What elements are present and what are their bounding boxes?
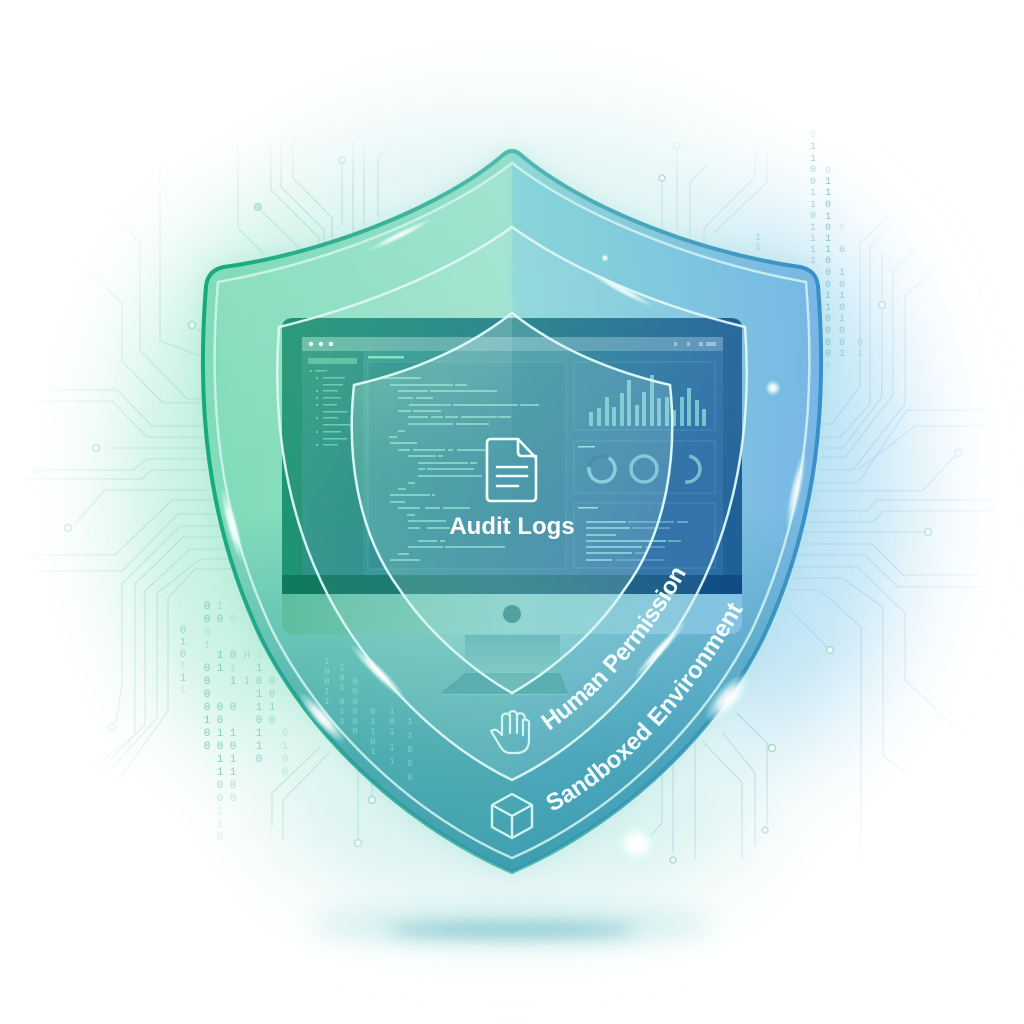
window dots [309, 342, 333, 346]
binary rain left: 0 [269, 715, 275, 727]
donut panel [574, 441, 715, 493]
monitor [282, 318, 742, 695]
binary rain right: 0 [825, 314, 831, 325]
binary rain left: 0 [217, 780, 223, 792]
light flares [216, 215, 811, 866]
binary rain right: 1 [755, 303, 761, 314]
binary rain left: 1 [282, 741, 289, 753]
binary rain right: 0 [825, 280, 831, 291]
binary rain left: 0 [204, 663, 210, 675]
top right traces [662, 149, 768, 244]
table panel [574, 503, 715, 568]
binary seen through the glass: 1 [389, 757, 395, 767]
binary seen through the glass: 1 [389, 727, 395, 737]
binary rain right: 1 [825, 245, 831, 256]
binary seen through the glass: 0 [370, 737, 376, 747]
binary rain right: 0 [839, 303, 845, 314]
monitor power button [503, 605, 521, 623]
outer shield body [203, 151, 821, 872]
binary seen through the glass: 1 [324, 657, 330, 667]
middle shield: Human Permission layer [277, 227, 747, 780]
inner shield left facet [352, 313, 512, 470]
label: Human Permission: Human Permission [540, 568, 686, 730]
binary rain right: 0 [857, 338, 863, 349]
binary rain right: 1 [839, 314, 845, 325]
binary rain left: 0 [217, 702, 223, 714]
binary rain right: 1 [810, 223, 816, 234]
binary rain right: 0 [825, 349, 831, 360]
binary rain right: 0 [810, 165, 816, 176]
label: Audit Logs: Audit Logs [449, 513, 575, 540]
binary rain right: 0 [825, 268, 831, 279]
binary seen through the glass: 1 [339, 663, 345, 673]
binary rain left: 0 [269, 676, 275, 688]
binary rain left: 0 [230, 793, 236, 805]
window controls [674, 342, 716, 346]
binary rain left: 0 [230, 780, 236, 792]
icon: audit document [487, 439, 536, 501]
binary rain right: 0 [825, 200, 831, 211]
binary rain right: 0 [825, 256, 831, 267]
binary rain right: 1 [825, 303, 831, 314]
binary rain right: 1 [825, 188, 831, 199]
monitor chin [282, 594, 742, 634]
binary seen through the glass: 0 [352, 707, 358, 717]
binary rain left: 1 [230, 663, 237, 675]
binary rain left: 0 [269, 689, 275, 701]
binary rain right: 1 [857, 349, 863, 360]
binary rain left: 1 [256, 741, 263, 753]
binary rain right: 0 [839, 338, 845, 349]
binary rain right: 0 [839, 280, 845, 291]
binary rain left: 1 [217, 806, 224, 818]
binary rain left: 1 [204, 640, 211, 652]
monitor stand [440, 635, 568, 695]
binary seen through the glass: 1 [389, 707, 395, 717]
binary rain right: 1 [810, 256, 816, 267]
binary rain right: 0 [825, 166, 831, 177]
binary rain left: 0 [256, 754, 262, 766]
binary seen through the glass: 0 [352, 697, 358, 707]
monitor lower bezel [282, 575, 742, 594]
binary rain left: 0 [204, 627, 210, 639]
binary rain left: 0 [180, 649, 186, 661]
binary rain right: 0 [825, 338, 831, 349]
binary rain left: 0 [217, 614, 223, 626]
binary rain left: 1 [180, 673, 187, 685]
binary seen through the glass: 0 [407, 759, 413, 769]
binary seen through the glass: 0 [352, 677, 358, 687]
binary rain right: 0 [825, 361, 831, 372]
left circuit traces [27, 140, 394, 840]
binary rain right [755, 130, 863, 372]
code panel [368, 356, 566, 569]
binary rain left: 1 [256, 650, 263, 662]
binary seen through the glass: 0 [352, 727, 358, 737]
outer shield lower shading [203, 151, 821, 872]
binary seen through the glass: 1 [339, 683, 345, 693]
binary rain right: 0 [825, 223, 831, 234]
binary rain right: 1 [755, 243, 761, 254]
circuit nodes [24, 143, 1000, 863]
binary rain right: 1 [810, 142, 816, 153]
binary rain right: 0 [839, 326, 845, 337]
binary rain left: 0 [204, 702, 210, 714]
binary rain left: 0 [282, 754, 288, 766]
binary rain left: 0 [204, 676, 210, 688]
binary rain left: 1 [217, 767, 224, 779]
binary seen through the glass: 0 [339, 697, 345, 707]
binary rain right: 1 [825, 291, 831, 302]
binary rain right: 1 [810, 200, 816, 211]
binary rain right: 0 [810, 177, 816, 188]
binary rain left: 1 [180, 637, 187, 649]
binary seen through the glass: 0 [389, 717, 395, 727]
binary seen through the glass: 1 [407, 731, 413, 741]
binary rain left: 1 [204, 715, 211, 727]
binary rain left: 0 [204, 601, 210, 613]
outer glow [203, 151, 821, 872]
binary rain left: 1 [256, 702, 263, 714]
binary seen through the glass: 1 [389, 743, 395, 753]
binary rain left: 1 [244, 676, 251, 688]
binary rain right: 0 [825, 326, 831, 337]
binary rain left: 0 [230, 702, 236, 714]
binary seen through the glass: 1 [370, 717, 376, 727]
binary rain right: 1 [825, 212, 831, 223]
binary rain right: 1 [825, 234, 831, 245]
binary seen through the glass: 0 [339, 673, 345, 683]
circuit traces [24, 140, 1000, 863]
binary rain left: 0 [217, 793, 223, 805]
binary rain right: 0 [755, 291, 761, 302]
binary rain left: 1 [230, 676, 237, 688]
binary rain right: 0 [839, 245, 845, 256]
icon: cube [492, 794, 532, 838]
binary rain left: 0 [230, 741, 236, 753]
binary rain right: 1 [839, 349, 845, 360]
binary rain right: 0 [810, 211, 816, 222]
binary rain left: 0 [282, 728, 288, 740]
outer shield inner line [215, 163, 809, 858]
binary rain left: 1 [230, 767, 237, 779]
binary seen through the glass: 1 [339, 707, 345, 717]
outer shield: Sandboxed Environment layer [203, 151, 821, 872]
binary rain right: 1 [825, 177, 831, 188]
binary rain left: 0 [230, 614, 236, 626]
binary rain left [180, 601, 289, 844]
binary rain left: 0 [180, 625, 186, 637]
binary rain right: 1 [810, 188, 816, 199]
binary rain right: 0 [839, 223, 845, 234]
binary rain left: H [244, 650, 250, 662]
binary seen through the glass: 0 [324, 677, 330, 687]
binary seen through the glass: 1 [339, 717, 345, 727]
binary seen through the glass: 0 [407, 745, 413, 755]
binary rain left: 1 [230, 728, 237, 740]
binary rain left: 0 [282, 767, 288, 779]
binary rain right: 1 [755, 233, 761, 244]
bar chart panel [574, 362, 715, 430]
binary rain left: 0 [256, 676, 262, 688]
binary seen through the glass [324, 657, 413, 783]
outer shield right facet [512, 163, 806, 480]
binary seen through the glass: 0 [352, 687, 358, 697]
monitor foot [440, 673, 568, 694]
binary rain left: 1 [230, 754, 237, 766]
background glow [112, 100, 912, 900]
icon: hand [491, 711, 529, 753]
binary seen through the glass: 1 [324, 687, 330, 697]
binary seen through the glass: 0 [370, 707, 376, 717]
binary rain left: 1 [217, 819, 224, 831]
binary rain right: 1 [810, 245, 816, 256]
binary rain right: 1 [839, 268, 845, 279]
binary rain left: 0 [230, 650, 236, 662]
binary rain right: 0 [755, 258, 761, 269]
binary rain left: 1 [180, 685, 187, 697]
binary rain right: 1 [839, 291, 845, 302]
binary seen through the glass: 1 [407, 717, 413, 727]
binary rain right: 1 [810, 154, 816, 165]
binary rain left: 0 [217, 741, 223, 753]
binary rain left: 0 [217, 715, 223, 727]
binary rain left: 1 [217, 601, 224, 613]
outer shield left facet [218, 163, 512, 480]
monitor bezel [282, 318, 742, 594]
inner shield body [352, 313, 672, 693]
binary rain left: 1 [217, 663, 224, 675]
binary rain left: 0 [204, 741, 210, 753]
binary rain right: 0 [810, 130, 816, 141]
label: Sandboxed Environment: Sandboxed Environment [546, 602, 743, 810]
binary rain left: 1 [256, 689, 263, 701]
binary rain left: 1 [269, 702, 276, 714]
binary seen through the glass: 1 [324, 697, 330, 707]
ground shadow [312, 905, 712, 945]
binary seen through the glass: 1 [370, 727, 376, 737]
binary seen through the glass: 1 [370, 747, 376, 757]
right circuit traces [650, 207, 997, 860]
binary rain right: 1 [810, 234, 816, 245]
binary seen through the glass: 0 [407, 773, 413, 783]
binary rain left: 1 [217, 650, 224, 662]
binary rain left: 1 [256, 728, 263, 740]
binary rain left: 1 [180, 661, 187, 673]
window header [302, 337, 723, 351]
binary rain left: 0 [204, 689, 210, 701]
binary seen through the glass: 0 [352, 717, 358, 727]
binary rain left: 0 [256, 715, 262, 727]
sidebar [302, 351, 363, 575]
binary rain left: 1 [256, 663, 263, 675]
binary rain left: 1 [217, 754, 224, 766]
layer labels [490, 568, 743, 840]
screen [302, 337, 723, 575]
binary rain left: 0 [217, 832, 223, 844]
binary seen through the glass: 0 [324, 667, 330, 677]
binary rain left: 1 [217, 728, 224, 740]
binary rain left: 0 [204, 728, 210, 740]
inner shield: Audit Logs layer [352, 313, 672, 693]
binary rain left: 0 [204, 614, 210, 626]
binary rain right: 1 [755, 273, 761, 284]
